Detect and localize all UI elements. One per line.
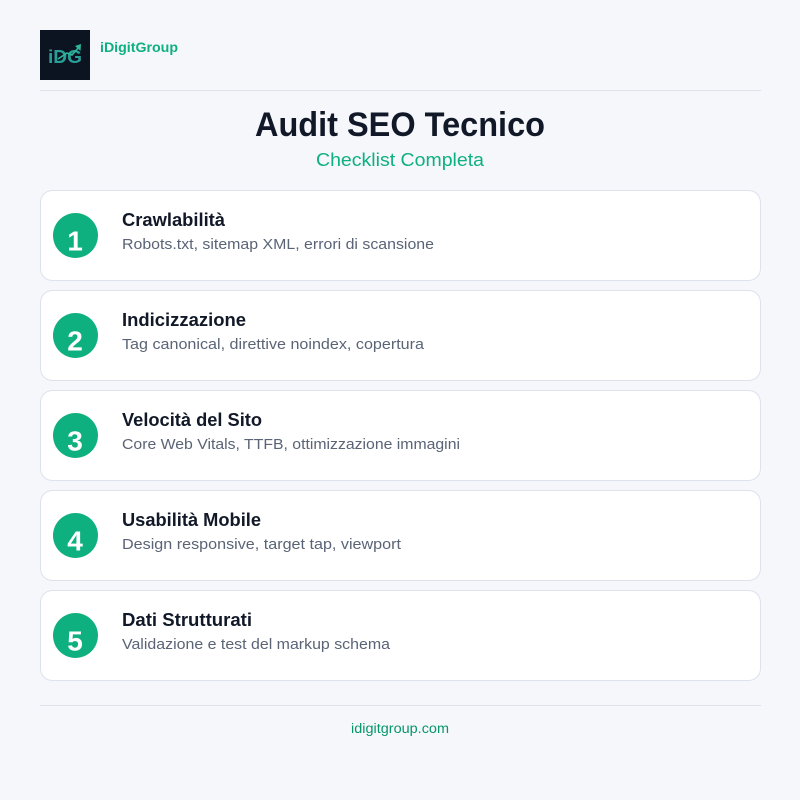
icon: number 4: 4 xyxy=(67,526,83,556)
panel: step 4 xyxy=(40,490,760,580)
step 4 description: Design responsive, target tap, viewport xyxy=(122,536,402,553)
step 1 description: Robots.txt, sitemap XML, errori di scansione xyxy=(122,236,434,253)
icon: number 5 xyxy=(53,613,98,658)
icon: number 1: 1 xyxy=(67,226,83,256)
icon: number 2: 2 xyxy=(67,326,83,356)
step 5 title: Dati Strutturati xyxy=(122,610,252,630)
panel: step 5 xyxy=(40,590,760,680)
step 1 title: Crawlabilità xyxy=(122,210,226,230)
icon: number 5: 5 xyxy=(67,626,83,656)
brand name: iDigitGroup xyxy=(100,39,178,55)
footer: website: idigitgroup.com xyxy=(351,721,449,736)
step 5 description: Validazione e test del markup schema xyxy=(122,636,391,653)
panel: step 3 xyxy=(40,390,760,480)
icon: number 3: 3 xyxy=(67,426,83,456)
subtitle: Checklist Completa xyxy=(316,150,485,170)
title: Audit SEO Tecnico xyxy=(255,106,545,144)
icon: number 3 xyxy=(53,413,98,458)
step 3 description: Core Web Vitals, TTFB, ottimizzazione immagini xyxy=(122,436,460,453)
step 3 title: Velocità del Sito xyxy=(122,410,262,430)
step 2 title: Indicizzazione xyxy=(122,310,246,330)
header: logo and brand xyxy=(40,30,178,80)
icon: iDigitGroup logo: iDG xyxy=(48,47,82,67)
icon: number 1 xyxy=(53,213,98,258)
panel: step 1 xyxy=(40,190,760,280)
icon: number 2 xyxy=(53,313,98,358)
step 2 description: Tag canonical, direttive noindex, copertura xyxy=(122,336,425,353)
panel: step 2 xyxy=(40,290,760,380)
step 4 title: Usabilità Mobile xyxy=(122,510,261,530)
icon: number 4 xyxy=(53,513,98,558)
